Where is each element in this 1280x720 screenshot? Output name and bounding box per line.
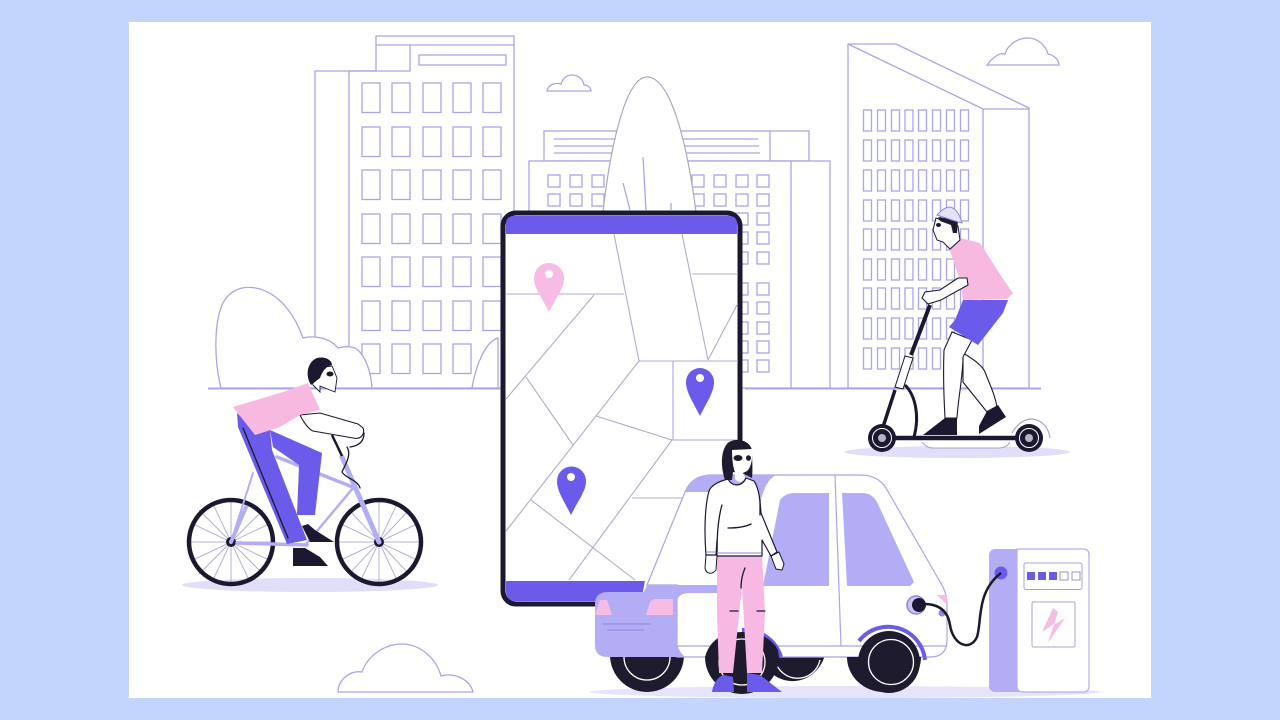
rider front leg bbox=[944, 332, 972, 418]
phone header bar bbox=[506, 216, 737, 234]
car right window bbox=[842, 493, 914, 586]
cyclist shirt bbox=[233, 383, 320, 435]
building: right tower bbox=[848, 44, 1029, 388]
charger battery display bbox=[1024, 563, 1082, 590]
sweater hem bbox=[706, 552, 761, 553]
cyclist eye bbox=[326, 372, 334, 376]
scooter stem sleeve bbox=[895, 356, 913, 389]
charger port bbox=[994, 566, 1008, 580]
middle block windows bbox=[548, 175, 769, 372]
left tower windows bbox=[362, 83, 501, 374]
cyclist near leg bbox=[237, 413, 307, 544]
ground line bbox=[208, 388, 1041, 390]
rider back leg bbox=[963, 353, 997, 412]
car middle wheel with fender bbox=[705, 630, 781, 694]
woman knee marks bbox=[730, 568, 765, 611]
woman standing bbox=[705, 440, 784, 692]
car roof lavender bbox=[685, 475, 777, 503]
woman sweater bbox=[705, 478, 777, 556]
cyclist on bicycle bbox=[189, 357, 421, 584]
scooter undercarriage bbox=[922, 442, 1010, 448]
bicycle right wheel bbox=[337, 500, 421, 584]
cloud: top right bbox=[987, 38, 1059, 65]
building: gherkin tower bbox=[603, 77, 696, 212]
car wheels under the body bbox=[610, 655, 825, 692]
cyclist shoes bbox=[293, 524, 334, 566]
car tail lights bbox=[595, 595, 947, 615]
right tower windows bbox=[864, 110, 968, 369]
scooter rear wheel bbox=[1015, 424, 1043, 452]
charger lightning icon bbox=[1032, 602, 1075, 647]
bicycle left wheel bbox=[189, 500, 273, 584]
woman trousers bbox=[717, 555, 765, 673]
woman hair bbox=[722, 440, 752, 480]
panel: white background bbox=[129, 22, 1151, 698]
charging station bbox=[989, 549, 1089, 692]
rider on scooter bbox=[868, 207, 1050, 452]
rider hair bbox=[938, 217, 958, 233]
car front wheel with fender bbox=[847, 627, 925, 693]
rider shoes bbox=[923, 405, 1006, 435]
rider eye bbox=[936, 223, 941, 227]
bicycle frame bbox=[231, 457, 379, 545]
ground shadow: scooter bbox=[844, 446, 1070, 458]
scooter front wheel bbox=[868, 424, 896, 452]
rider shirt bbox=[948, 238, 1013, 300]
cyclist arm bbox=[300, 413, 364, 438]
cyclist neck and face bbox=[312, 366, 337, 392]
phone bottom bar bbox=[506, 581, 645, 601]
map pin: purple right bbox=[686, 368, 714, 416]
car rear bumper bbox=[595, 585, 717, 657]
scooter stem and curve bbox=[883, 305, 930, 437]
car body bbox=[647, 475, 947, 657]
woman shoes bbox=[712, 673, 782, 692]
map roads bbox=[506, 234, 738, 580]
scooter deck bbox=[890, 436, 1022, 440]
car left window bbox=[763, 493, 829, 586]
map pin: pink bbox=[534, 263, 564, 312]
building: middle block bbox=[529, 131, 830, 388]
rider shorts bbox=[949, 300, 1008, 345]
charging cable and plug bbox=[907, 573, 1001, 645]
ground shadow: car bbox=[590, 686, 1100, 698]
cyclist hair bbox=[308, 357, 332, 385]
building: left tower bbox=[315, 36, 514, 388]
rider neck and face bbox=[933, 218, 960, 249]
cloud: small centre bbox=[547, 75, 591, 91]
phone with map bbox=[503, 213, 740, 604]
woman sweater details bbox=[717, 500, 760, 552]
woman right hand bbox=[771, 552, 784, 570]
map pin: purple left bbox=[557, 466, 586, 515]
cloud: bottom left bbox=[338, 644, 473, 692]
electric car bbox=[595, 475, 947, 694]
ground shadow: cyclist bbox=[182, 578, 438, 592]
rider hat bbox=[937, 207, 962, 223]
scooter rear fender bbox=[1012, 419, 1050, 438]
handlebar and brake cable bbox=[332, 433, 364, 488]
cyclist far leg bbox=[270, 430, 322, 515]
bushes bbox=[216, 287, 498, 388]
rider arm bbox=[922, 278, 968, 304]
woman face bbox=[732, 449, 752, 482]
woman eyes bbox=[734, 455, 751, 461]
car door lines bbox=[677, 475, 947, 646]
rear bumper details bbox=[603, 624, 651, 630]
woman left hand bbox=[705, 555, 717, 573]
